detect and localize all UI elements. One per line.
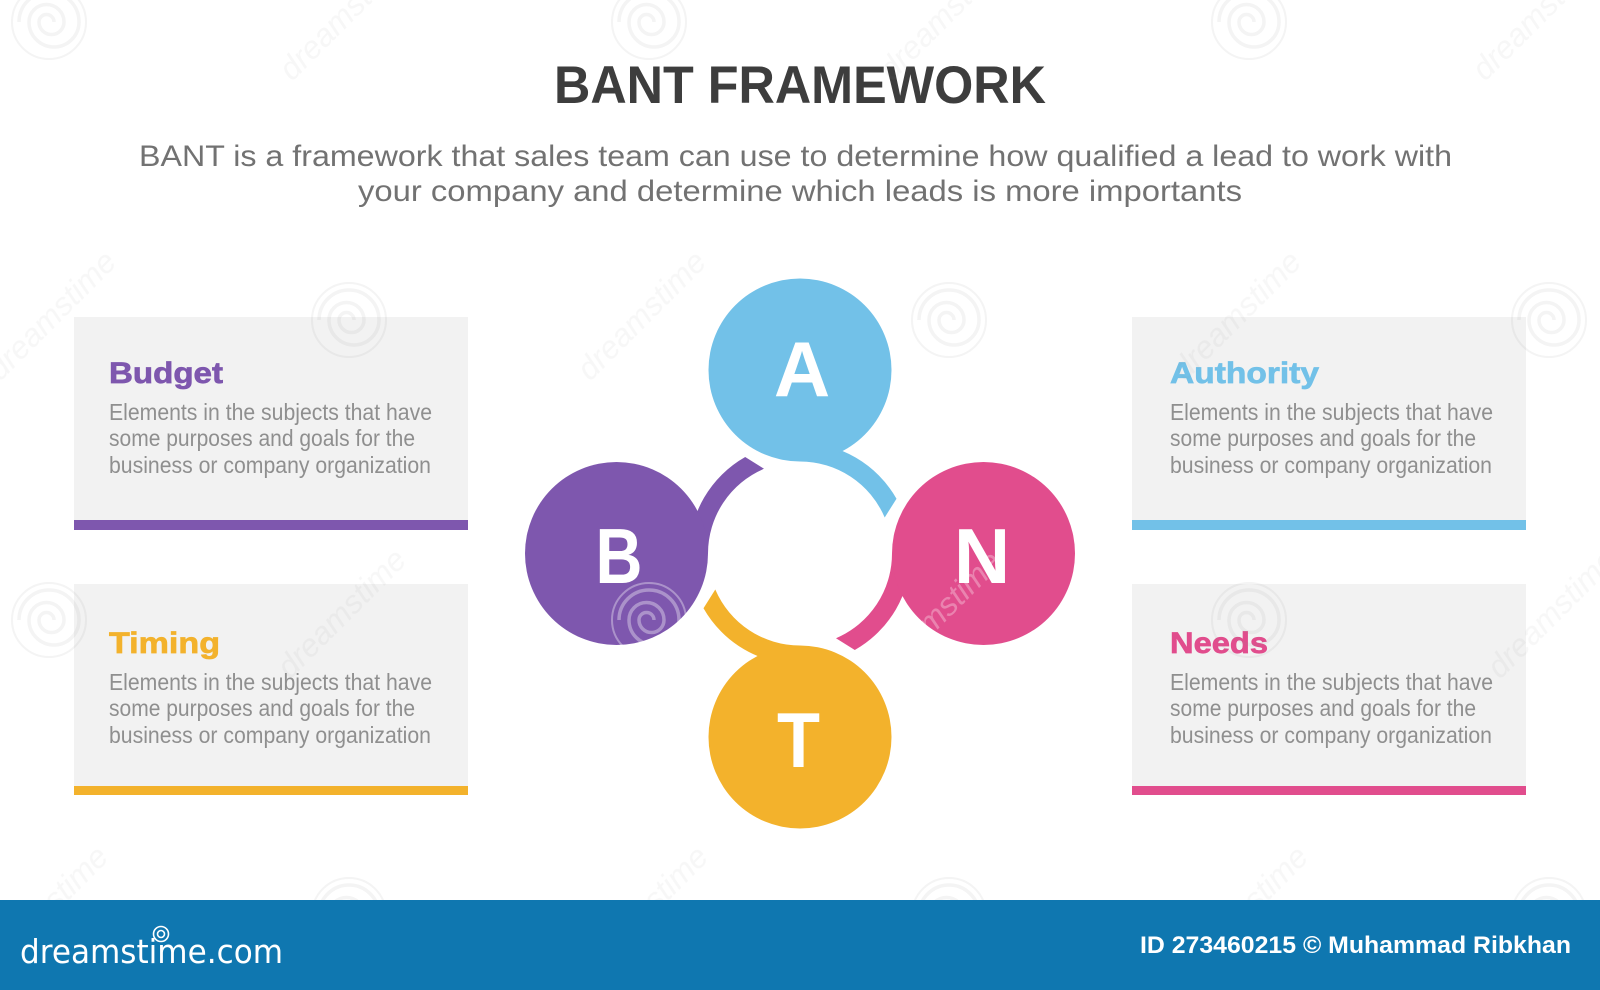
- circle: N: N: [954, 512, 1010, 600]
- panel: timing: business or company organization: [109, 722, 431, 748]
- panel: needs: Needs: [1170, 627, 1268, 660]
- title: BANT FRAMEWORK: [554, 56, 1046, 115]
- arc: budget tail: [689, 457, 764, 554]
- arc: authority tail: [800, 442, 896, 518]
- panel: timing: some purposes and goals for the: [109, 695, 415, 721]
- panel: authority: Authority: [1170, 357, 1319, 390]
- arc: timing tail: [704, 590, 800, 664]
- circle: T: [708, 646, 892, 828]
- panel: budget: some purposes and goals for the: [109, 425, 415, 451]
- watermark overlay on circles: [612, 543, 1008, 687]
- panel: budget: Elements in the subjects that have: [109, 399, 432, 425]
- arc: needs tail: [836, 554, 911, 650]
- panel: timing: Elements in the subjects that have: [109, 669, 432, 695]
- panel: needs: [1132, 584, 1526, 795]
- watermark text: dreamstime: [571, 838, 715, 982]
- panel: needs: some purposes and goals for the: [1170, 695, 1476, 721]
- panel: needs: Elements in the subjects that have: [1170, 669, 1493, 695]
- icon: logo spiral: [154, 926, 168, 942]
- footer bar: [0, 900, 1600, 990]
- panel: budget: [74, 317, 468, 530]
- panel: authority: Elements in the subjects that have: [1170, 399, 1493, 425]
- watermark text: dreamstime: [1171, 838, 1315, 982]
- watermark overlay on circles: dreamstime: [864, 543, 1008, 687]
- subtitle: BANT is a framework that sales team can use to determine how qualified a lead to work with: [139, 140, 1452, 173]
- circle: A: A: [774, 325, 830, 413]
- watermark text: dreamstime: [1164, 243, 1308, 387]
- footer credit: ID 273460215 © Muhammad Ribkhan: [1140, 932, 1571, 959]
- circle: B: B: [596, 512, 642, 600]
- panel: authority: business or company organization: [1170, 452, 1492, 478]
- panel: budget: business or company organization: [109, 452, 431, 478]
- circle: T: T: [777, 696, 820, 784]
- subtitle: your company and determine which leads is more importants: [358, 175, 1242, 208]
- footer logo: dreamstime.com: [20, 932, 283, 971]
- panel: budget: Budget: [109, 357, 223, 390]
- circle: A: [708, 278, 892, 462]
- circle: B: [525, 462, 708, 645]
- circle: N: [892, 462, 1075, 645]
- panel: authority: some purposes and goals for the: [1170, 425, 1476, 451]
- watermark text: dreamstime: [269, 541, 413, 685]
- watermark text: dreamstime: [569, 243, 713, 387]
- diagram: BANT circles: [525, 278, 1075, 828]
- panel: needs: business or company organization: [1170, 722, 1492, 748]
- subtitle: [139, 140, 1452, 208]
- panel: timing: Timing: [109, 627, 220, 660]
- panel: authority: [1132, 317, 1526, 530]
- panel: timing: [74, 584, 468, 795]
